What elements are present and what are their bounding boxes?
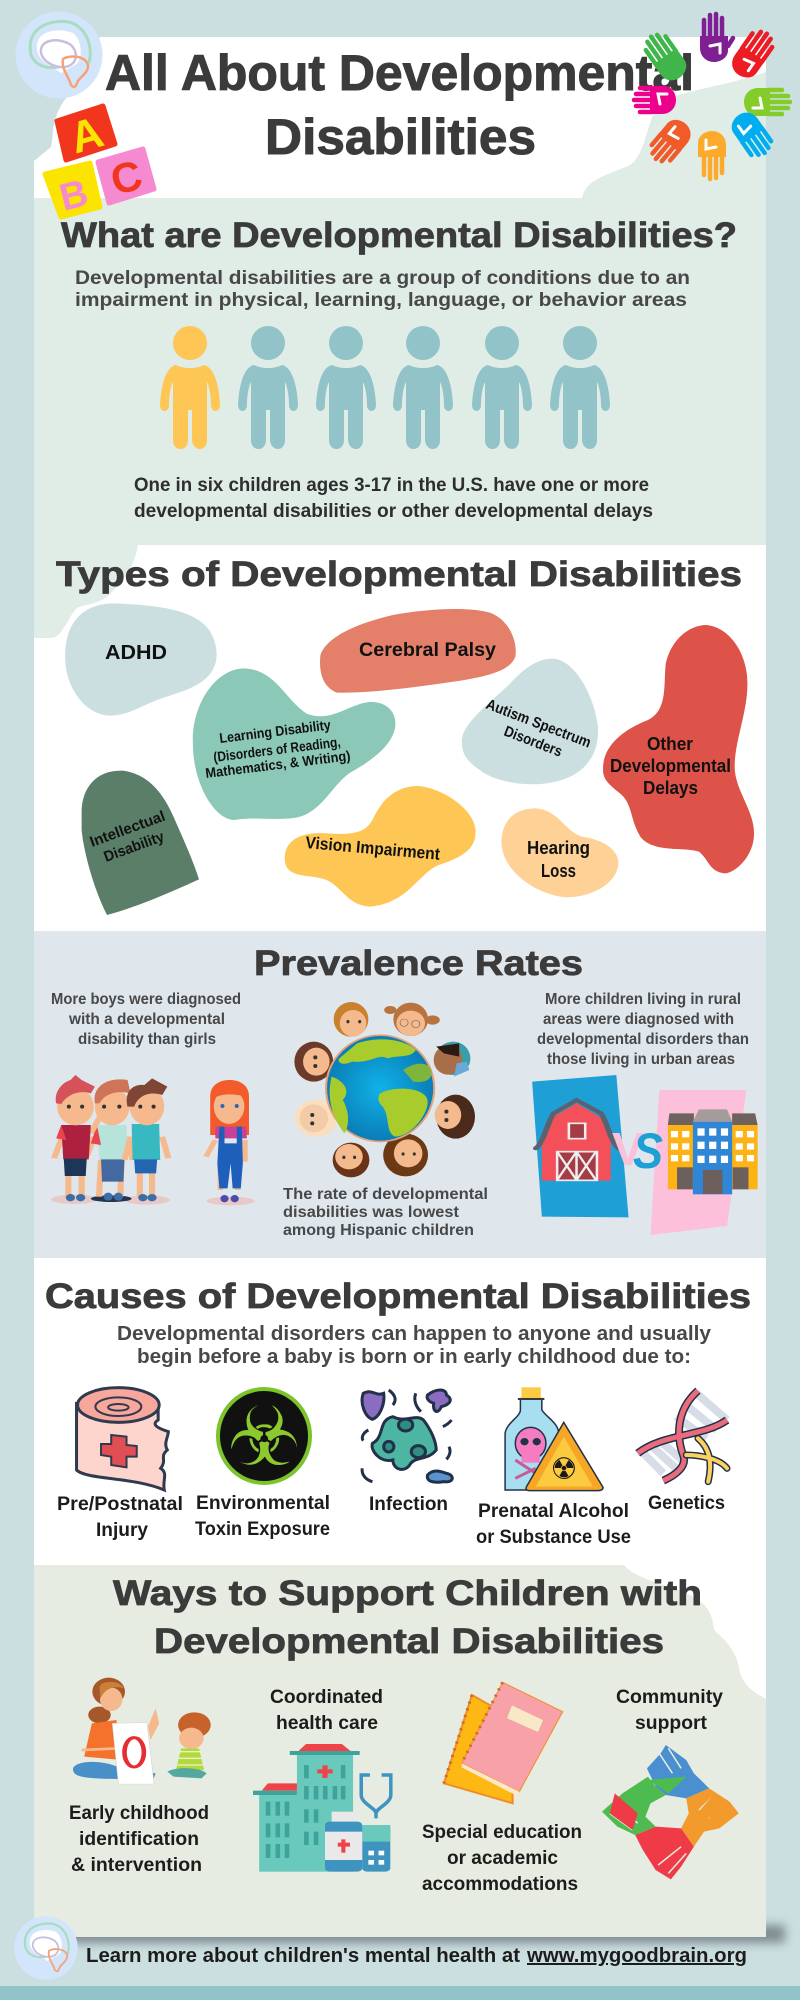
icon: bandage roll	[77, 1388, 168, 1490]
label: ADHD: ADHD	[105, 642, 167, 664]
label: autism spectrum disorders: Autism Spectrum	[484, 696, 593, 752]
footer text: Learn more about children's mental health at	[86, 1945, 520, 1967]
label: learning disability	[204, 716, 351, 781]
illustration: globe with children around it	[294, 1002, 475, 1177]
text: boys vs girls: with a developmental	[68, 1011, 225, 1028]
label: learning disability: (Disorders of Reading,	[212, 733, 341, 765]
text: boys vs girls	[51, 991, 241, 1048]
statistic text: One in six children ages 3-17 in the U.S. have one or more	[134, 475, 649, 496]
illustration: teacher and child with flash card	[73, 1678, 211, 1784]
heading: ways to support	[113, 1574, 702, 1661]
label: prenatal alcohol or substance use	[476, 1501, 631, 1548]
label: intellectual disability: Intellectual	[88, 808, 168, 851]
text: boys vs girls: More boys were diagnosed	[51, 991, 241, 1008]
label: prenatal alcohol or substance use: or Substance Use	[476, 1527, 631, 1548]
label: autism spectrum disorders: Disorders	[502, 723, 565, 761]
label: early childhood identification: identification	[79, 1829, 199, 1850]
label: special education: or academic	[447, 1848, 558, 1869]
panel: types of developmental disabilities	[34, 544, 766, 931]
illustration: hospital and medicine	[253, 1744, 391, 1872]
icon: poison bottle and radiation warning: ☢	[551, 1452, 577, 1487]
panel: ways to support children	[34, 1565, 766, 1937]
footer text: www.mygoodbrain.org	[526, 1945, 747, 1967]
icon: ABC blocks: B	[56, 172, 92, 220]
definition text	[75, 268, 690, 311]
panel: causes of developmental disabilities	[34, 1258, 766, 1565]
icon: ABC blocks	[45, 106, 154, 220]
causes intro text: Developmental disorders can happen to anyone and usually	[117, 1323, 712, 1345]
label: prenatal alcohol or substance use: Prenatal Alcohol	[478, 1501, 629, 1522]
label: other developmental delays: Other	[647, 734, 693, 754]
label: community support: Community	[616, 1687, 723, 1708]
label: genetics: Genetics	[648, 1493, 725, 1514]
text: hispanic children: The rate of developmental	[283, 1186, 488, 1203]
heading: prevalence: Prevalence Rates	[254, 944, 583, 983]
definition text: impairment in physical, learning, language, or behavior areas	[75, 290, 687, 311]
icon: ABC blocks: C	[106, 151, 147, 204]
icon: ABC blocks: A	[65, 107, 109, 163]
text: VS	[612, 1123, 663, 1179]
label: hearing loss: Hearing	[527, 838, 590, 858]
footer text	[86, 1945, 747, 1967]
label: other developmental delays: Developmental	[610, 756, 731, 776]
label: hearing loss: Loss	[541, 861, 576, 881]
label: special education	[422, 1822, 582, 1895]
heading: what are: What are Developmental Disabilities?	[61, 216, 737, 255]
statistic text: developmental disabilities or other developmental delays	[134, 501, 653, 522]
label: environmental toxin exposure: Toxin Exposure	[195, 1519, 330, 1540]
title	[105, 45, 694, 165]
text: rural vs urban	[537, 991, 749, 1068]
label: learning disability: Mathematics, & Writing)	[204, 747, 351, 781]
label: coordinated health care: Coordinated	[270, 1687, 383, 1708]
label: special education: accommodations	[422, 1874, 578, 1895]
label: other developmental delays	[610, 734, 731, 798]
label: early childhood identification: Early childhood	[69, 1803, 209, 1824]
text: rural vs urban: those living in urban areas	[547, 1051, 735, 1068]
label: cerebral palsy: Cerebral Palsy	[359, 640, 496, 661]
statistic text	[134, 475, 653, 522]
title: All About Developmental	[105, 45, 694, 101]
text: rural vs urban: areas were diagnosed with	[543, 1011, 734, 1028]
label: environmental toxin exposure: Environmental	[196, 1493, 330, 1514]
label: other developmental delays: Delays	[643, 778, 698, 798]
panel: header	[34, 37, 766, 198]
heading: ways to support: Developmental Disabilities	[154, 1622, 664, 1661]
causes intro text	[117, 1323, 712, 1368]
panel: what are developmental disabilities	[34, 72, 766, 545]
label: intellectual disability: Disability	[102, 828, 167, 866]
footer bar	[0, 1986, 800, 2000]
heading: types: Types of Developmental Disabilities	[56, 555, 742, 594]
icon: ring of colourful handprints	[634, 14, 790, 179]
panel: prevalence rates	[34, 931, 766, 1258]
text: hispanic children: among Hispanic children	[283, 1222, 474, 1239]
label: pre/postnatal injury: Injury	[96, 1520, 148, 1541]
text: VS: S	[633, 1123, 663, 1179]
text: VS: V	[612, 1123, 644, 1175]
text: rural vs urban: developmental disorders than	[537, 1031, 749, 1048]
icon: biohazard symbol: ☣	[227, 1390, 301, 1485]
label: pre/postnatal injury	[57, 1494, 183, 1541]
label: vision impairment: Vision Impairment	[305, 833, 441, 864]
illustration: three boys and a girl	[51, 1075, 255, 1205]
causes intro text: begin before a baby is born or in early childhood due to:	[137, 1346, 691, 1368]
icon: germs	[362, 1390, 452, 1482]
label: special education: Special education	[422, 1822, 582, 1843]
text: hispanic children	[283, 1186, 488, 1239]
label: pre/postnatal injury: Pre/Postnatal	[57, 1494, 183, 1515]
logo: brain footer	[14, 1916, 78, 1980]
text: rural vs urban: More children living in rural	[545, 991, 741, 1008]
icon: DNA strand	[638, 1391, 727, 1482]
text: hispanic children: disabilities was lowest	[283, 1204, 460, 1221]
label: community support: support	[635, 1713, 708, 1734]
label: early childhood identification	[69, 1803, 209, 1876]
label: coordinated health care	[270, 1687, 383, 1734]
label: coordinated health care: health care	[276, 1713, 378, 1734]
label: community support	[616, 1687, 723, 1734]
label: infection: Infection	[369, 1494, 448, 1515]
heading: causes: Causes of Developmental Disabilities	[45, 1277, 751, 1316]
label: hearing loss	[527, 838, 590, 881]
icon row: one in six children	[160, 326, 610, 449]
icon: poison bottle and radiation warning	[505, 1387, 603, 1491]
illustration: spiral notebooks	[444, 1682, 563, 1803]
heading: ways to support: Ways to Support Children with	[113, 1574, 702, 1613]
label: learning disability: Learning Disability	[218, 716, 332, 746]
label: environmental toxin exposure	[195, 1493, 330, 1540]
definition text: Developmental disabilities are a group of conditions due to an	[75, 268, 690, 289]
illustration: barn versus city buildings	[532, 1075, 758, 1235]
logo: brain top	[16, 12, 102, 98]
illustration: four linked hands	[602, 1745, 739, 1879]
text: boys vs girls: disability than girls	[78, 1031, 216, 1048]
blobs	[65, 603, 754, 915]
label: early childhood identification: & intervention	[71, 1855, 202, 1876]
title: Disabilities	[265, 109, 536, 165]
